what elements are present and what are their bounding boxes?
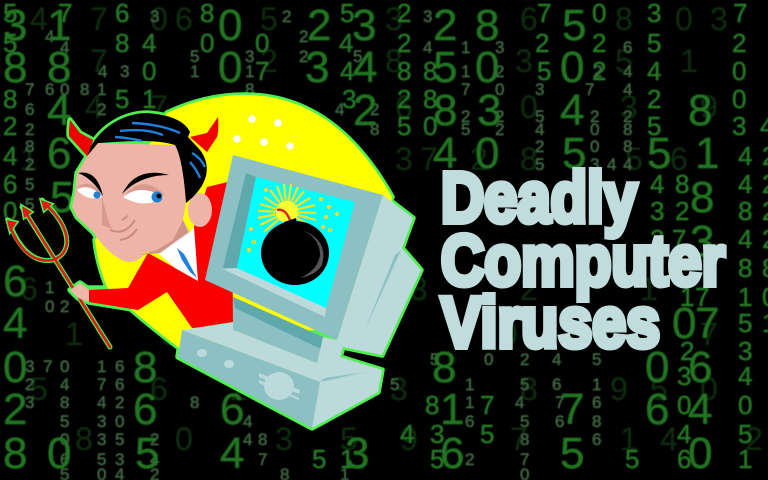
background: green matrix digits: 476039 [85,89,718,125]
eyebrows [78,172,169,196]
bomb spark [247,184,339,252]
background: green matrix digits: 6 [3,257,27,306]
background: green matrix digits: 428348 [47,86,712,135]
background: green matrix digits: 323 [150,7,432,26]
background: green matrix digits: 31023285 [3,1,586,50]
background: green matrix digits: 2661764 [3,385,712,434]
background: green matrix digits: 53046568 [60,412,601,431]
illustration: devil with computer [7,95,421,428]
title line: Viruses: Viruses [441,284,660,363]
eye lids [75,184,166,197]
background: green matrix digits: 43545 [400,419,752,449]
background: green matrix digits: 43111224 [98,62,632,81]
background: green matrix digits: 03524886 [60,430,601,449]
necktie [177,248,197,278]
bomb [261,210,329,285]
hair [88,113,207,203]
background: green matrix digits: 5 [25,175,34,194]
background: green matrix digits: 2852408 [25,120,632,139]
devil figure [69,113,233,328]
background: green matrix digits: 23 [680,336,752,366]
background: green matrix digits: 02 [45,297,69,316]
background: green matrix digits: 58 [50,173,714,222]
background: green matrix digits: 4706536803 [30,1,728,37]
background: green matrix digits: 515561 [312,444,752,474]
background: green matrix digits: 5 [25,195,34,214]
background: green matrix digits: 85132820 [3,84,746,114]
background: green matrix digits: 42 [45,27,308,46]
yellow circle [95,95,392,350]
background: green matrix digits: 80543650 [3,429,712,478]
trident [7,200,110,347]
computer [178,155,421,428]
background: green matrix digits: 407 [3,299,719,348]
horns [69,117,218,157]
nose and mouth [102,197,112,229]
base [182,322,382,382]
background: green matrix digits: 58400422252 [3,28,746,58]
background: green matrix digits: 44136 [60,38,632,57]
background: green matrix digits: 728351 [90,43,698,79]
background: green matrix digits: 1372856 [20,141,688,177]
title [441,159,725,363]
green outline [69,95,421,428]
background: green matrix digits: 6534727 [60,450,529,469]
background: green matrix digits: 1 [45,278,54,297]
background: green matrix digits: 6242 [25,100,379,119]
ear [188,193,212,227]
background: green matrix digits: 247651561 [25,375,601,394]
base buttons and logo [197,349,207,357]
background: green matrix digits: 803597142 [75,421,763,457]
background: green matrix digits: 22522 [461,107,632,126]
title line: Deadly: Deadly [441,159,637,238]
background: green matrix digits: 074885240 [142,56,746,86]
screen [237,177,355,308]
background: green matrix digits: 88034500 [3,43,584,92]
neck shade [140,220,188,255]
red jacket [89,181,233,328]
background: green matrix digits: 64842 [3,169,768,199]
background: green matrix digits: 25344 [25,155,632,174]
background: green matrix digits: 442 [3,141,768,171]
hair highlights [115,123,205,178]
background: green matrix digits: 8208 [25,137,632,156]
background: green matrix digits: 640551 [47,129,719,178]
background: green matrix digits: 384281476 [25,393,601,412]
eyes [77,187,164,204]
background: green matrix digits: 8700 [425,390,752,420]
screen recess [223,173,256,268]
hand [70,283,89,302]
background: green matrix digits: 34 [677,361,752,391]
background: green matrix digits: 5325 [190,47,362,66]
monitor bezel [205,155,383,340]
collar [158,227,198,281]
background: green matrix digits: 37016 [25,357,124,376]
background: green matrix digits: 50245 [430,350,601,369]
background: green matrix digits: 16382057 [65,316,718,352]
background: green matrix digits: 250534 [3,111,768,141]
background: green matrix digits: 08806 [3,343,712,392]
background: green matrix digits: 3 [690,217,714,266]
monitor side [337,195,421,355]
title line: Computer: Computer [441,222,725,301]
background: green matrix digits: 03282 [3,196,768,226]
background: green matrix digits: 562738950 [30,371,718,407]
background: green matrix digits: 76081870374 [25,80,632,99]
face [72,143,190,262]
background: green matrix digits: 60321 [20,271,658,307]
stand [233,297,323,363]
icon: white dots [233,115,294,150]
